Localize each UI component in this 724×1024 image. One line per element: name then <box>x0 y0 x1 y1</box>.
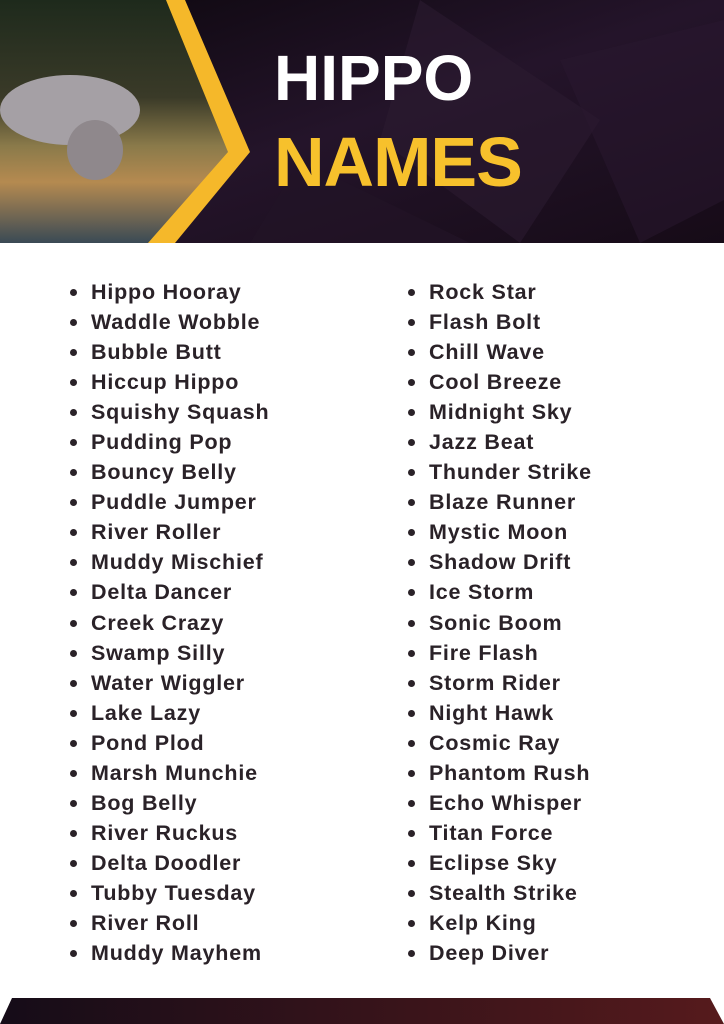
list: left column: Puddle Jumper <box>91 490 257 514</box>
list: left column: Squishy Squash <box>91 400 269 424</box>
list: right column: Jazz Beat <box>429 430 534 454</box>
list: right column: Storm Rider <box>429 671 561 695</box>
list: left column: Bog Belly <box>91 791 197 815</box>
list: left column: Delta Dancer <box>91 580 232 604</box>
list: left column: Muddy Mischief <box>91 550 263 574</box>
list: right column: Sonic Boom <box>429 611 562 635</box>
photo: hippo <box>0 0 240 243</box>
list: right column: Flash Bolt <box>429 310 541 334</box>
list: right column: Ice Storm <box>429 580 534 604</box>
list: left column: Marsh Munchie <box>91 761 258 785</box>
list: left column <box>70 280 269 965</box>
list: right column: Cosmic Ray <box>429 731 560 755</box>
list: left column: Creek Crazy <box>91 611 224 635</box>
list: left column: Pudding Pop <box>91 430 232 454</box>
list: left column: Swamp Silly <box>91 641 225 665</box>
header banner <box>0 0 724 243</box>
list: left column: River Ruckus <box>91 821 238 845</box>
list: right column: Kelp King <box>429 911 537 935</box>
list: left column: River Roll <box>91 911 199 935</box>
icon: yellow chevron <box>148 0 250 243</box>
list: right column: Mystic Moon <box>429 520 568 544</box>
list: left column: Bouncy Belly <box>91 460 237 484</box>
list: left column: Tubby Tuesday <box>91 881 256 905</box>
list: right column: Blaze Runner <box>429 490 576 514</box>
list: left column: Lake Lazy <box>91 701 201 725</box>
list: left column: River Roller <box>91 520 221 544</box>
list: left column: Muddy Mayhem <box>91 941 262 965</box>
list: left column: Hiccup Hippo <box>91 370 239 394</box>
list: left column: Hippo Hooray <box>91 280 242 304</box>
list: right column <box>408 280 592 965</box>
list: right column: Echo Whisper <box>429 791 582 815</box>
list: right column: Stealth Strike <box>429 881 578 905</box>
list: right column: Chill Wave <box>429 340 545 364</box>
list: right column: Fire Flash <box>429 641 539 665</box>
list: right column: Deep Diver <box>429 941 549 965</box>
title: HIPPO: HIPPO <box>274 42 473 114</box>
list: right column: Rock Star <box>429 280 537 304</box>
list: right column: Titan Force <box>429 821 553 845</box>
list: right column: Eclipse Sky <box>429 851 557 875</box>
list: left column: Water Wiggler <box>91 671 245 695</box>
list: right column: Thunder Strike <box>429 460 592 484</box>
list: right column: Midnight Sky <box>429 400 572 424</box>
list: right column: Phantom Rush <box>429 761 590 785</box>
footer bar <box>0 998 724 1024</box>
list: right column: Shadow Drift <box>429 550 571 574</box>
list: left column: Waddle Wobble <box>91 310 260 334</box>
list: left column: Delta Doodler <box>91 851 241 875</box>
list: left column: Pond Plod <box>91 731 204 755</box>
list: left column: Bubble Butt <box>91 340 222 364</box>
title: NAMES: NAMES <box>274 123 522 201</box>
list: right column: Night Hawk <box>429 701 554 725</box>
list: right column: Cool Breeze <box>429 370 562 394</box>
